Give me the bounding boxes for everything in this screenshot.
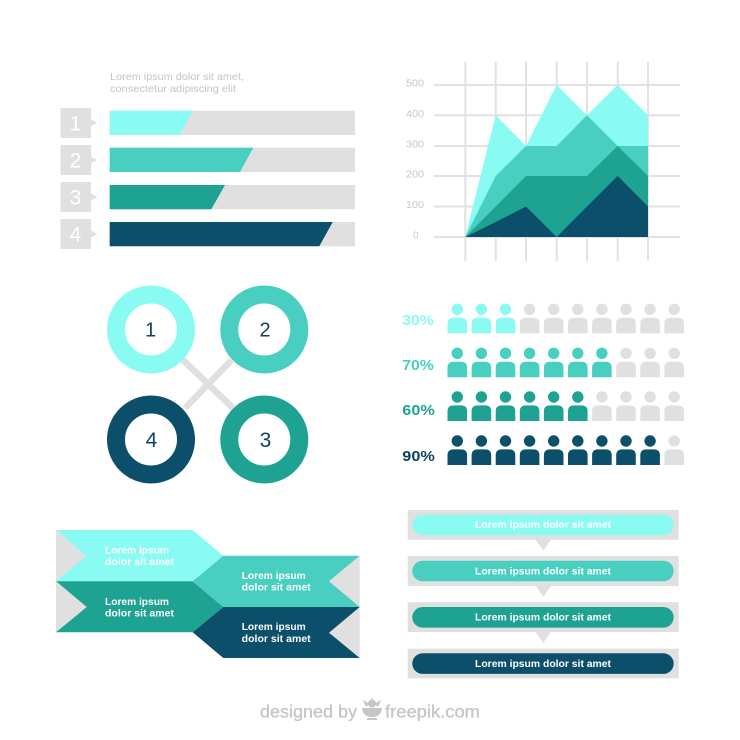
panel: numbered circles: [116, 294, 299, 474]
ribbon 2: dolor sit amet: [105, 608, 174, 620]
area series 4: [465, 176, 648, 237]
bar row 2: 2: [70, 150, 81, 173]
ribbon 1: [56, 530, 223, 581]
circle 4: [116, 404, 186, 474]
text block: bars intro: [110, 71, 244, 95]
pill step 3: [408, 602, 679, 643]
watermark: designed by freepik: [260, 698, 480, 722]
axis labels: 300: [406, 140, 424, 150]
axis labels: 400: [406, 109, 424, 120]
ribbon 3: [193, 556, 360, 607]
panel: people pictograms: [402, 304, 684, 465]
ribbon 3: dolor sit amet: [242, 582, 311, 594]
circle 2: [229, 294, 299, 364]
pill step 1: [408, 510, 679, 551]
row 90%: [402, 435, 684, 465]
circle 1: [116, 294, 186, 364]
row 90%: 90%: [402, 448, 435, 465]
pill step 3: Lorem ipsum dolor sit amet: [475, 612, 611, 624]
bar row 2: [60, 145, 355, 175]
watermark: designed by freepik: freepik.com: [385, 702, 480, 722]
ribbon 1: Lorem ipsum: [105, 544, 169, 556]
row 70%: 70%: [402, 357, 434, 374]
axis labels: 200: [406, 170, 424, 180]
bar row 4: [60, 219, 355, 249]
circle 4: 4: [146, 429, 158, 452]
bar row 1: [60, 108, 355, 138]
text block: bars intro: Lorem ipsum dolor sit amet,: [110, 71, 244, 83]
bar row 1: 1: [70, 113, 81, 136]
row 60%: 60%: [402, 402, 435, 419]
axis labels: 0: [413, 230, 419, 242]
row 60%: [402, 391, 684, 421]
pill step 2: [408, 556, 679, 597]
area series 2: [465, 115, 648, 237]
bar row 3: 3: [70, 187, 81, 210]
ribbon 1: dolor sit amet: [105, 556, 174, 568]
circle 3: [229, 404, 299, 474]
watermark: designed by freepik: designed by: [260, 702, 357, 722]
pill step 4: [408, 649, 679, 678]
pill step 1: Lorem ipsum dolor sit amet: [475, 519, 611, 531]
circle 3: 3: [260, 429, 271, 452]
panel: arrow ribbons: [56, 530, 360, 658]
area series 3: [465, 146, 648, 237]
pill step 2: Lorem ipsum dolor sit amet: [475, 565, 611, 577]
ribbon 4: [193, 607, 360, 658]
axis labels: 500: [406, 78, 424, 90]
ribbon 2: [56, 581, 223, 632]
icon: freepik crown: [362, 698, 382, 720]
row 70%: [402, 348, 684, 377]
panel: pill steps: [408, 510, 679, 678]
pill step 4: Lorem ipsum dolor sit amet: [475, 658, 611, 670]
circle 1: 1: [145, 319, 156, 341]
ribbon 2: Lorem ipsum: [105, 596, 169, 608]
bar row 4: 4: [70, 224, 82, 247]
area series 1: [465, 85, 648, 237]
ribbon 3: Lorem ipsum: [242, 570, 306, 582]
row 30%: [402, 304, 684, 333]
axis labels: [406, 78, 424, 242]
bar row 3: [60, 182, 355, 212]
circle 2: 2: [259, 319, 271, 341]
ribbon 4: dolor sit amet: [242, 633, 311, 645]
row 30%: 30%: [402, 312, 434, 329]
axis labels: 100: [406, 200, 424, 211]
text block: bars intro: consectetur adipiscing elit: [110, 83, 236, 95]
panel: progress bars: [60, 71, 355, 249]
ribbon 4: Lorem ipsum: [242, 621, 306, 633]
chart: stacked area chart: [406, 62, 680, 261]
